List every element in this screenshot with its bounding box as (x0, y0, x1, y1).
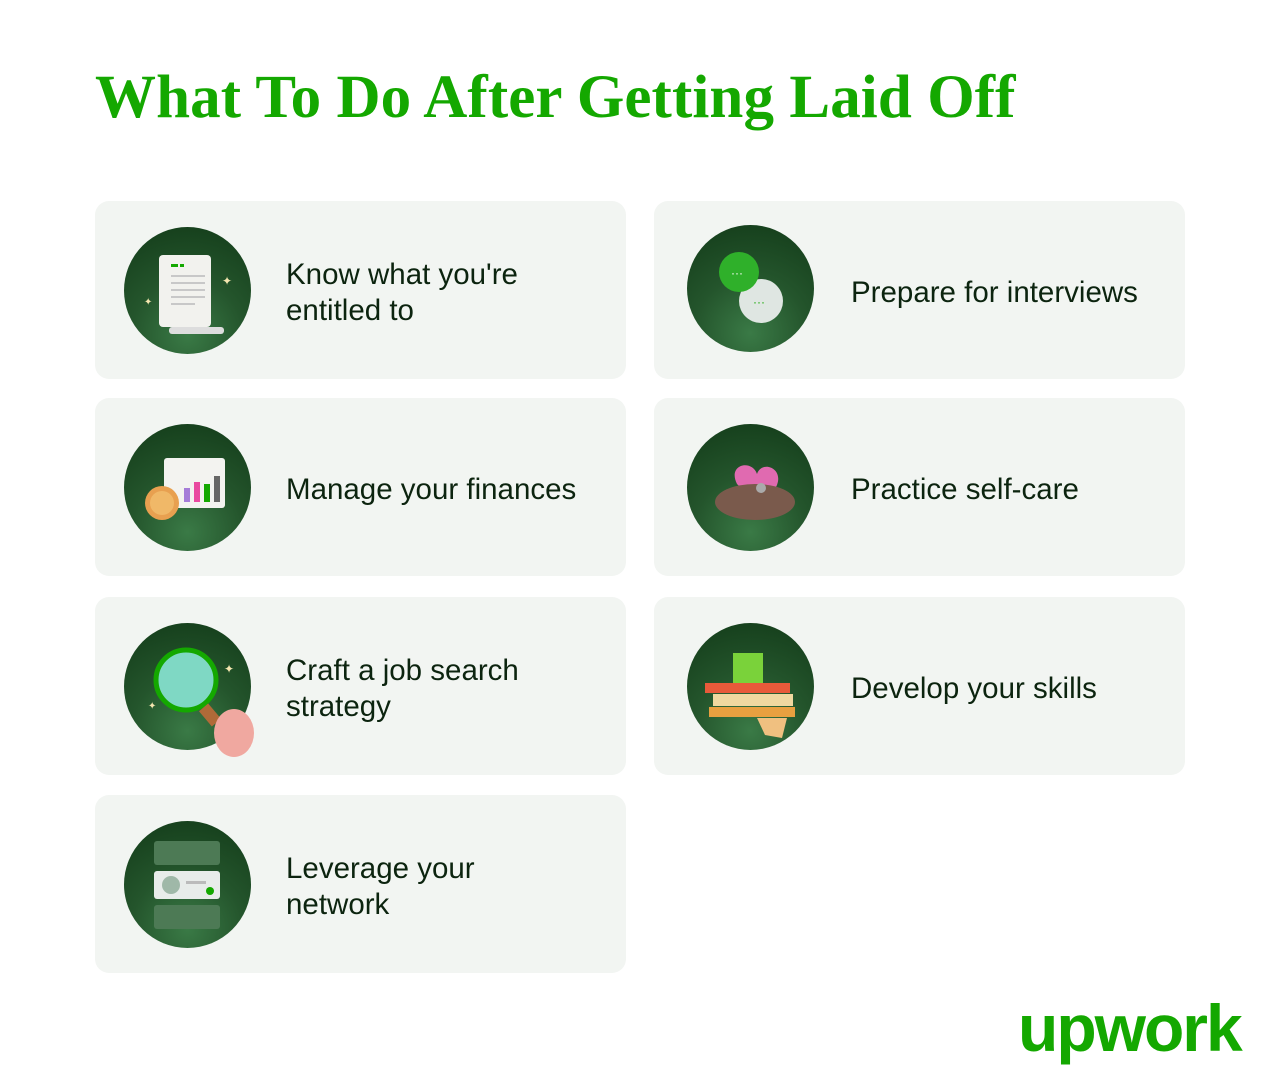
text (286, 852, 475, 921)
card: craft a job search strategy (95, 597, 626, 775)
icon: scroll (124, 227, 251, 354)
card: prepare for interviews (654, 201, 1185, 379)
card: manage your finances (95, 398, 626, 576)
text: strategy (286, 690, 391, 723)
icon: chat bubbles (687, 225, 814, 352)
card: know what you're entitled to (95, 201, 626, 379)
icon: magnifier: ✦ (224, 662, 234, 676)
icon: scroll: ✦ (144, 297, 152, 308)
card: develop your skills (654, 597, 1185, 775)
icon: magnifier: ✦ (148, 701, 156, 712)
icon: scroll: ✦ (222, 274, 232, 288)
text: Craft a job search (286, 654, 519, 687)
text: Practice self-care (851, 473, 1079, 506)
text: Leverage your (286, 852, 475, 885)
text (286, 258, 518, 327)
card: leverage your network (95, 795, 626, 973)
text: Manage your finances (286, 473, 576, 506)
icon: chart and coin (124, 424, 251, 551)
text (286, 654, 519, 723)
logo: upwork: upwork (1018, 991, 1241, 1065)
text: Know what you're (286, 258, 518, 291)
icon: chat bubbles: ··· (753, 295, 765, 309)
title: What To Do After Getting Laid Off (95, 64, 1016, 131)
icon: books and mug (687, 623, 814, 750)
icon: magnifier (124, 623, 251, 750)
icon: profile cards (124, 821, 251, 948)
card: practice self-care (654, 398, 1185, 576)
text: Prepare for interviews (851, 276, 1138, 309)
icon: chat bubbles: ··· (731, 266, 743, 280)
text: network (286, 888, 389, 921)
icon: heart in hand (687, 424, 814, 551)
text: entitled to (286, 294, 414, 327)
text: Develop your skills (851, 672, 1097, 705)
